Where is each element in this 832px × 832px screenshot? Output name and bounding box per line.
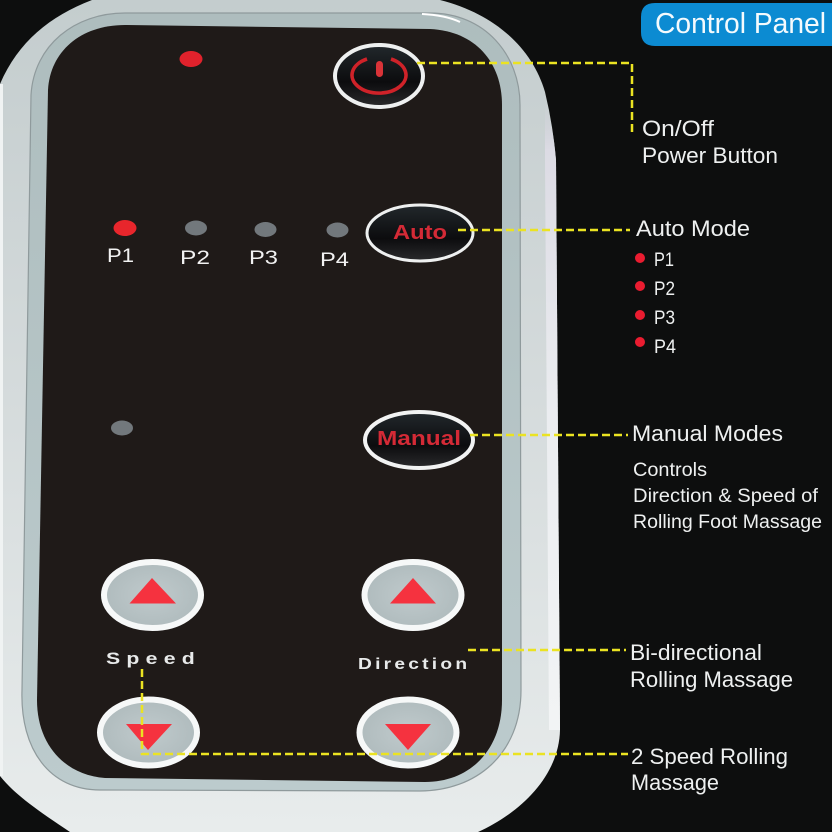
speed label: Speed bbox=[106, 650, 201, 668]
label: manual modes: Direction & Speed of bbox=[633, 486, 819, 507]
label: bi-directional rolling massage: Bi-directional bbox=[630, 640, 762, 665]
label: on/off power button: On/Off bbox=[642, 116, 715, 141]
label: auto mode: P3 bbox=[654, 308, 675, 329]
direction down button bbox=[360, 700, 456, 766]
device casing bbox=[0, 0, 560, 832]
program indicators P1-P4 bbox=[107, 220, 350, 271]
auto button bbox=[367, 205, 473, 261]
arrow: direction leader line bbox=[468, 649, 626, 651]
arrow: manual leader line bbox=[470, 434, 628, 436]
label: 2 speed rolling massage bbox=[631, 744, 788, 795]
heading: control panel: Control Panel bbox=[655, 8, 826, 40]
auto button: Auto bbox=[393, 222, 447, 244]
manual mode LED bbox=[111, 420, 133, 436]
label: 2 speed rolling massage: Massage bbox=[631, 770, 719, 795]
label: 2 speed rolling massage: 2 Speed Rolling bbox=[631, 744, 788, 769]
label: manual modes: Rolling Foot Massage bbox=[633, 512, 822, 533]
label: on/off power button: Power Button bbox=[642, 143, 778, 168]
manual button bbox=[365, 412, 473, 468]
power button bbox=[335, 45, 423, 107]
label: bi-directional rolling massage bbox=[630, 640, 793, 692]
black control panel bbox=[37, 25, 502, 782]
arrow: auto leader line bbox=[458, 229, 630, 231]
label: manual modes: Controls bbox=[633, 460, 707, 481]
manual button: Manual bbox=[377, 428, 461, 450]
speed up button bbox=[104, 562, 201, 628]
speed down button bbox=[100, 700, 197, 766]
label: auto mode: P2 bbox=[654, 279, 675, 300]
label: manual modes: Manual Modes bbox=[632, 421, 783, 446]
label: auto mode: Auto Mode bbox=[636, 216, 750, 241]
arrow: speed leader line bbox=[142, 669, 628, 754]
program indicators P1-P4: P2 bbox=[180, 248, 210, 269]
program indicators P1-P4: P3 bbox=[249, 248, 278, 269]
label: auto mode: P4 bbox=[654, 337, 676, 358]
program indicators P1-P4: P1 bbox=[107, 246, 134, 267]
label: manual modes bbox=[632, 421, 822, 533]
arrow: power leader line bbox=[417, 63, 632, 134]
label: auto mode bbox=[635, 216, 750, 358]
program indicators P1-P4: P4 bbox=[320, 250, 350, 271]
label: bi-directional rolling massage: Rolling Massage bbox=[630, 667, 793, 692]
direction up button bbox=[364, 562, 462, 628]
power indicator LED bbox=[180, 51, 202, 67]
direction label: Direction bbox=[358, 655, 470, 673]
heading: control panel bbox=[641, 3, 832, 46]
label: on/off power button bbox=[642, 116, 778, 168]
label: auto mode: P1 bbox=[654, 250, 674, 271]
